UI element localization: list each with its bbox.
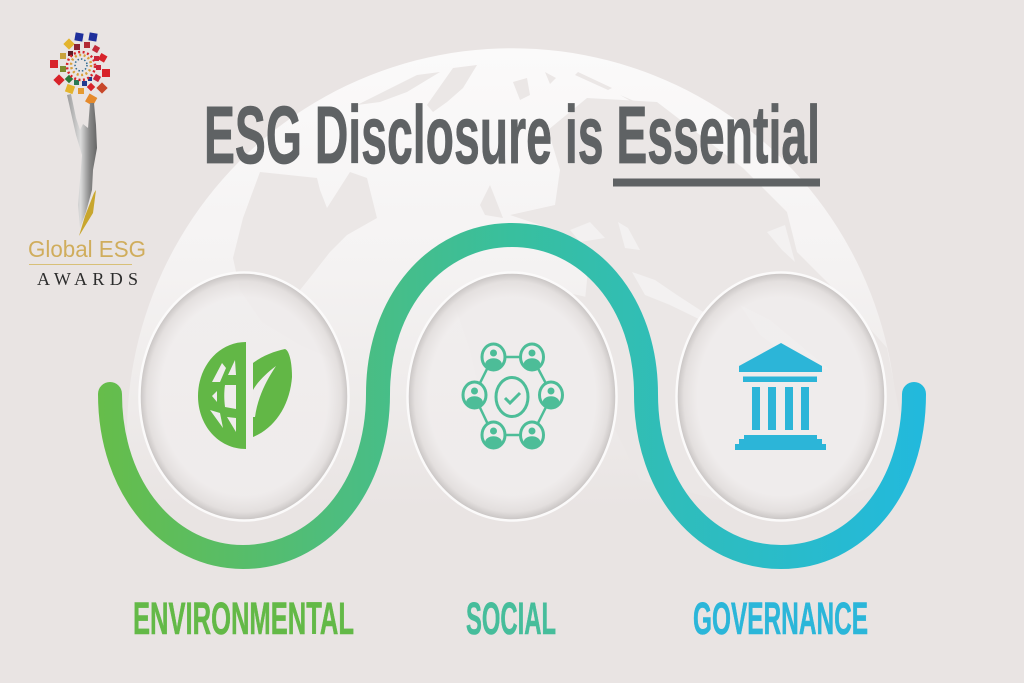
S-wave connector band: [110, 235, 914, 557]
logo: Global ESG Awards: [28, 32, 146, 289]
logo: reaching figure statue: [67, 94, 97, 236]
icon: classical building: [735, 343, 826, 450]
title underline: [613, 178, 820, 186]
icon: globe and leaf: [198, 342, 292, 449]
logo text: Global ESG: Global ESG: [28, 236, 146, 262]
panel: social circle: [408, 272, 616, 520]
logo text: AWARDS: AWARDS: [37, 269, 138, 289]
logo ring of coloured squares: [50, 32, 110, 106]
panel: environmental circle: [140, 272, 348, 520]
icon: people network with check: [463, 344, 562, 448]
label: social: SOCIAL: [466, 593, 556, 644]
logo rule: [29, 264, 132, 265]
label: governance: GOVERNANCE: [693, 593, 868, 644]
label: environmental: ENVIRONMENTAL: [133, 593, 354, 644]
globe with faint continents: [127, 48, 905, 600]
panel: governance circle: [676, 272, 886, 520]
